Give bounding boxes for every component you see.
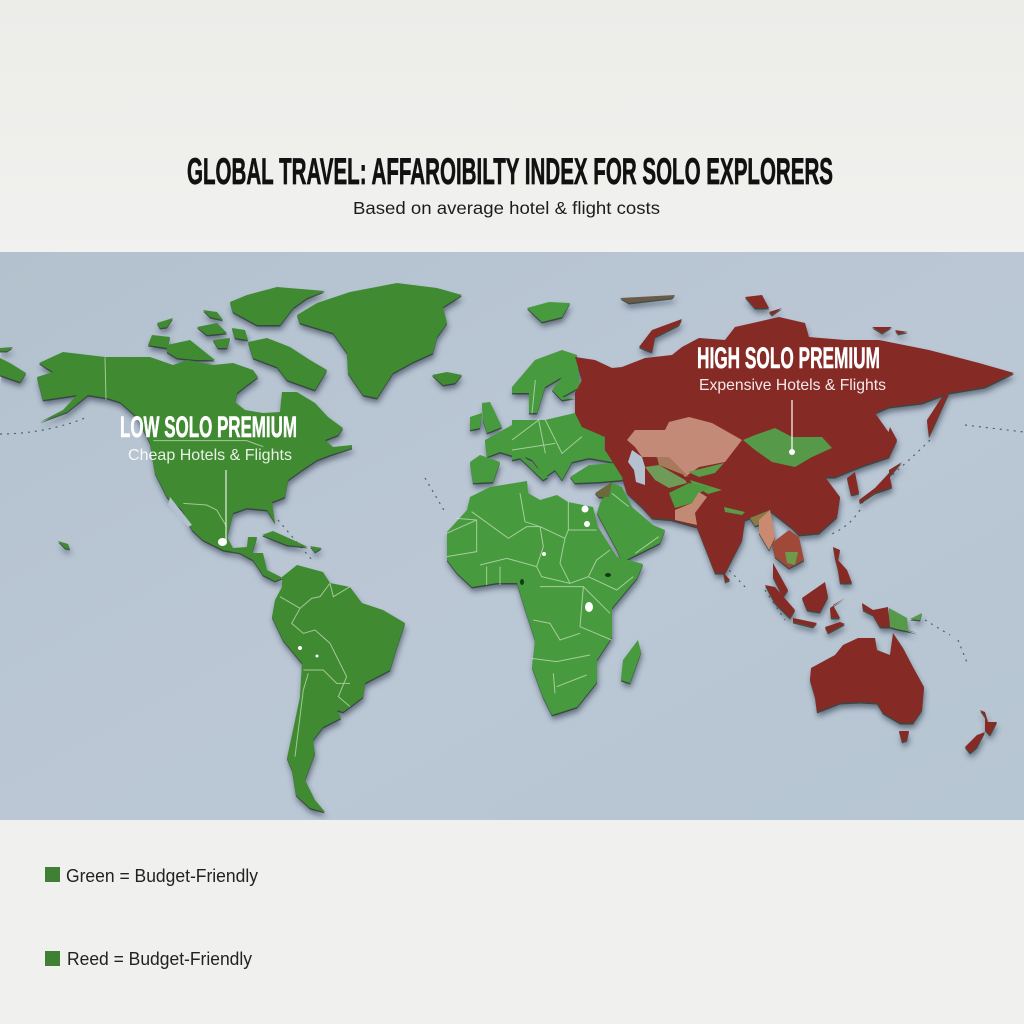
region: Mongolia <box>743 428 832 467</box>
country borders: North America <box>105 357 263 527</box>
location dots <box>298 506 593 658</box>
country borders: Europe and Arabia <box>512 380 659 553</box>
callout: high solo premium: Expensive Hotels & Flights <box>699 377 886 394</box>
region: North America <box>0 287 352 581</box>
region: Greenland and Iceland <box>297 283 462 398</box>
region: Russia, China and India <box>575 295 1014 582</box>
country borders: Africa and South America <box>280 493 633 757</box>
region: Africa and Middle East <box>447 463 665 715</box>
legend: green: Green = Budget-Friendly <box>66 866 258 886</box>
callout: low solo premium: LOW SOLO PREMIUM <box>120 411 297 444</box>
callout: low solo premium: Cheap Hotels & Flights <box>128 447 292 464</box>
region: Arctic islands <box>620 295 675 303</box>
region: Papua New Guinea <box>889 608 922 633</box>
callout: high solo premium <box>697 342 886 455</box>
subtitle: Based on average hotel & flight costs <box>353 198 660 218</box>
callout: low solo premium <box>120 411 297 546</box>
callout: high solo premium: HIGH SOLO PREMIUM <box>697 342 880 375</box>
region: Central Asia <box>595 417 742 525</box>
legend: red: Reed = Budget-Friendly <box>67 949 252 969</box>
panel: world map <box>0 252 1024 820</box>
inland seas: Caspian and Gulf of California <box>168 450 645 527</box>
region: Indonesia and Philippines <box>765 547 890 633</box>
region: Europe <box>470 302 622 483</box>
small island specks <box>0 418 1024 665</box>
land masses <box>0 283 1014 812</box>
region: Australia and New Zealand <box>810 633 997 753</box>
dark lake spots <box>520 573 611 585</box>
region: Nepal and Southeast Asia mainland <box>724 507 804 597</box>
region: South America <box>272 565 405 812</box>
